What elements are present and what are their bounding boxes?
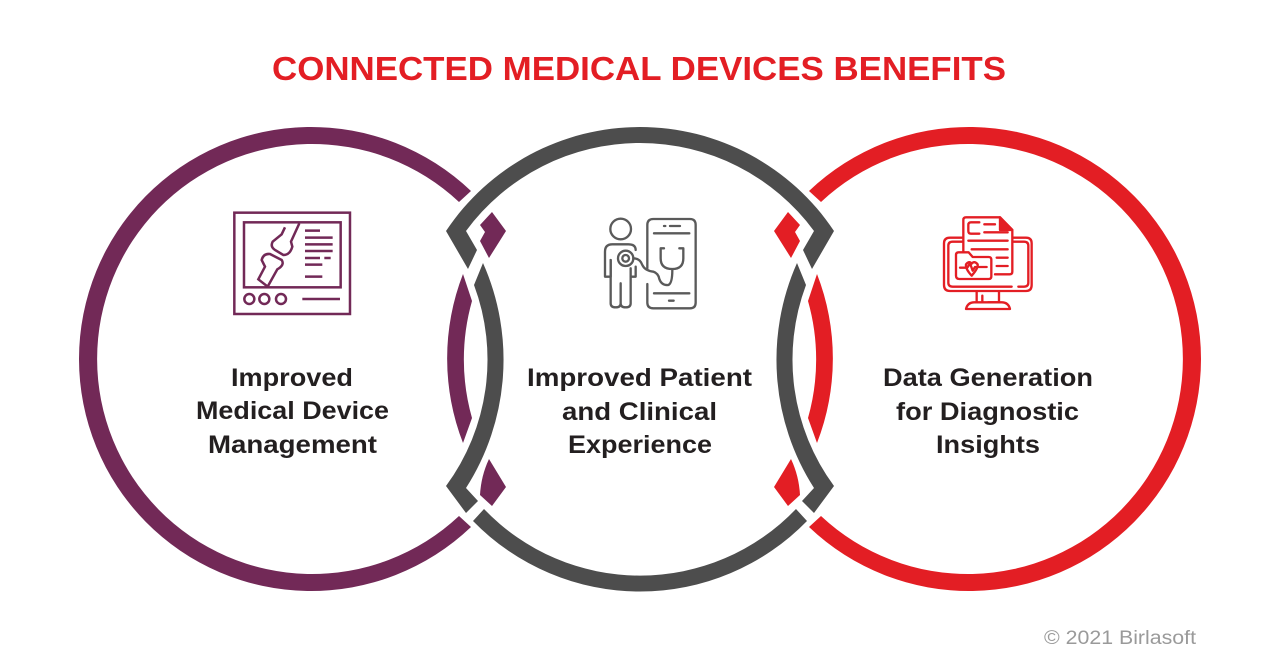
text block: centre label [527,364,753,459]
text block: right label: for Diagnostic [896,398,1079,426]
red inner lens arc [808,274,833,443]
title: CONNECTED MEDICAL DEVICES BENEFITS [272,50,1006,87]
purple inner lens arc [447,274,472,443]
text block: left label: Management [208,431,378,459]
purple upper diamond [480,212,506,258]
icon: patient and phone stethoscope [605,219,696,308]
text block: centre label: Improved Patient [527,364,753,392]
purple outer arc [79,127,471,591]
red outer arc [809,127,1201,591]
text block: right label [883,364,1093,459]
icon: bone x-ray monitor [234,213,350,314]
text block: right label: Data Generation [883,364,1093,392]
purple lower diamond [480,459,506,506]
text block: centre label: and Clinical [562,398,717,426]
copyright footer: © 2021 Birlasoft [1044,628,1197,649]
text block: left label: Improved [231,364,353,392]
red lower diamond [774,459,800,506]
text block: right label: Insights [936,431,1040,459]
text block: left label [196,364,389,459]
grey right inner arc [776,263,834,513]
panel: left purple ring [79,127,506,591]
text block: left label: Medical Device [196,397,389,425]
icon: medical report on monitor [944,217,1032,309]
panel: right red ring [774,127,1201,591]
text block: centre label: Experience [568,431,712,459]
grey bottom arc [473,509,807,592]
grey top arc [446,127,834,269]
panel: centre grey ring [446,127,834,592]
grey left inner arc [446,263,504,513]
red upper diamond [774,212,800,258]
